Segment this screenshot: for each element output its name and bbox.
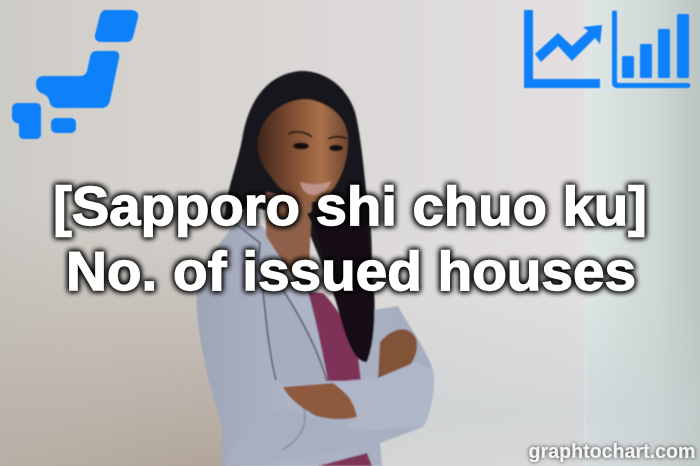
mouth <box>300 181 331 195</box>
shirt <box>308 292 361 381</box>
sleeve right <box>333 362 434 432</box>
title: No. of issued houses <box>66 240 636 302</box>
hand <box>378 329 417 378</box>
hair <box>224 71 375 363</box>
Kyushu <box>12 103 41 139</box>
jacket body <box>197 222 434 466</box>
neck and chest <box>266 192 312 290</box>
title: [Sapporo shi chuo ku] <box>53 175 647 237</box>
photo: woman with crossed arms <box>197 71 434 466</box>
watermark: graphtochart.com <box>528 441 696 463</box>
Honshu <box>36 51 119 108</box>
icon: line chart <box>524 10 602 88</box>
jacket lapel <box>260 224 328 385</box>
forearm <box>283 383 357 419</box>
eyes <box>293 142 309 150</box>
Shikoku <box>51 118 76 133</box>
title <box>53 175 647 302</box>
Hokkaido <box>95 10 138 42</box>
sleeve left <box>226 407 380 466</box>
lapel edges <box>236 224 327 381</box>
right hair front strand <box>307 190 375 362</box>
face <box>258 99 348 202</box>
icon: bar chart <box>612 10 690 88</box>
icon: Japan map <box>12 10 138 139</box>
